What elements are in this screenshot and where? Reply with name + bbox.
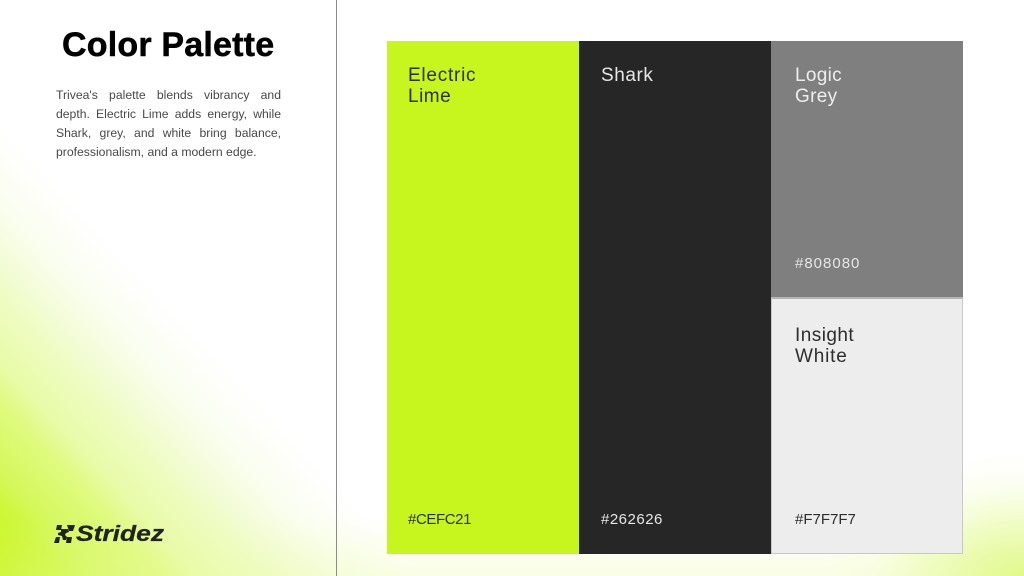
swatch name: Lime — [408, 86, 451, 107]
swatch name — [795, 325, 854, 367]
description text: professionalism, and a modern edge. — [56, 145, 257, 159]
panel: Logic Grey swatch — [771, 41, 963, 297]
swatch name: Shark — [601, 65, 653, 86]
swatch name: Insight — [795, 325, 854, 346]
logo: Stridez — [54, 521, 164, 546]
hex code: #CEFC21 — [408, 510, 471, 528]
swatch name — [408, 65, 476, 107]
swatch name: Logic — [795, 65, 842, 86]
swatch name: Grey — [795, 86, 837, 107]
panel: Electric Lime swatch — [387, 41, 579, 554]
hex code: #808080 — [795, 254, 860, 272]
description text: Trivea's palette blends vibrancy and — [56, 88, 281, 102]
panel: Shark swatch — [579, 41, 771, 554]
swatch name — [795, 65, 842, 107]
panel: Insight White swatch — [771, 297, 963, 554]
swatch name: White — [795, 346, 848, 367]
title: Color Palette — [62, 26, 274, 64]
logo wordmark: Stridez — [76, 521, 164, 546]
icon: Stridez mark — [54, 525, 75, 543]
description text: Shark, grey, and white bring balance, — [56, 126, 281, 140]
hex code: #F7F7F7 — [795, 511, 856, 528]
hex code: #262626 — [601, 510, 663, 528]
description text — [56, 88, 281, 159]
description text: depth. Electric Lime adds energy, while — [56, 107, 281, 121]
swatch name: Electric — [408, 65, 476, 86]
vertical divider — [336, 0, 337, 576]
